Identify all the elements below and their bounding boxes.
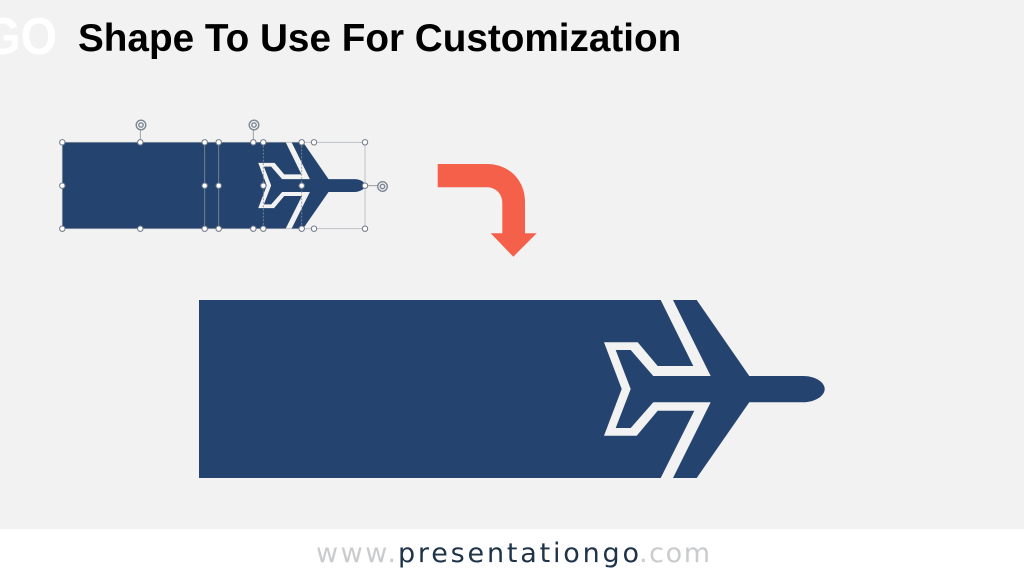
selection guides [62,126,382,229]
footer url: .com [639,538,710,569]
footer url [316,538,710,569]
small plane shape with selection handles [60,120,387,231]
small plane shape [62,142,365,229]
footer url: presentationgo [398,538,639,569]
title: Shape To Use For Customization [78,17,681,60]
arrow: bent down [438,164,537,257]
footer url: www. [316,538,396,569]
large plane shape [199,300,825,478]
rotation handles [136,120,387,191]
fuselage rectangle [199,300,694,478]
selection handles [60,140,368,231]
plane icon [616,300,825,478]
footer band [0,529,1024,576]
